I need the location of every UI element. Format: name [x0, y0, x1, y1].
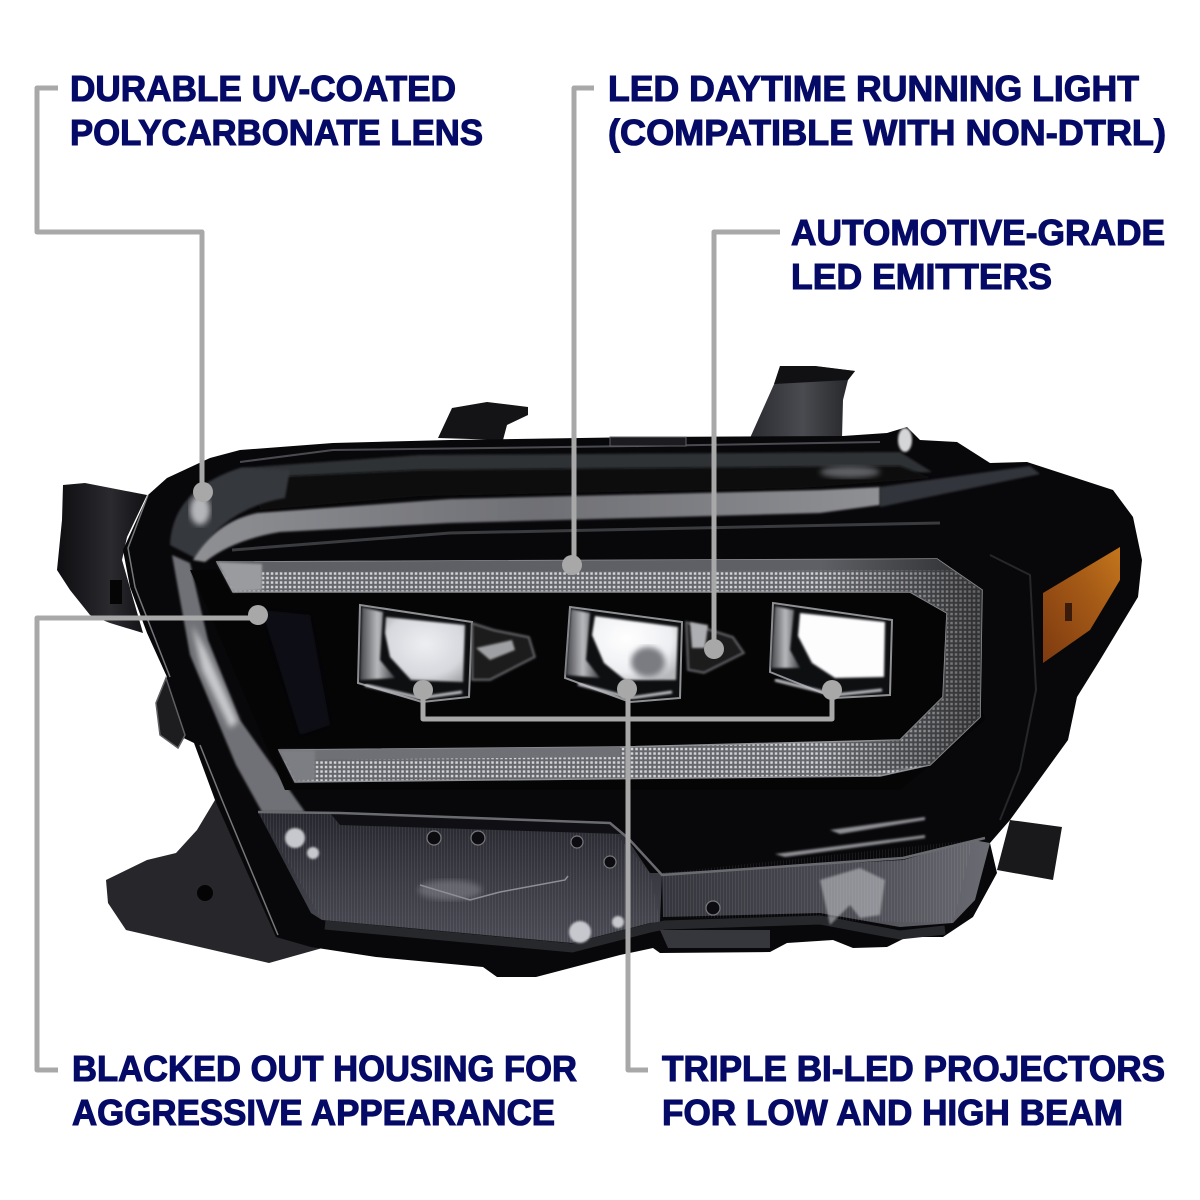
ribbed upper lens band — [240, 452, 932, 490]
corner reflection — [190, 495, 210, 525]
label: triple projectors — [662, 1048, 1165, 1133]
headlight illustration — [57, 366, 1142, 977]
amber side marker — [1043, 547, 1120, 663]
glare at top clip — [898, 428, 912, 452]
lens panel right section — [662, 840, 990, 927]
side emitter — [686, 622, 744, 673]
leader: daytime running light — [574, 88, 594, 565]
right rear bracket — [997, 820, 1062, 880]
right housing gloss edge — [990, 555, 1036, 820]
chrome frame — [770, 603, 892, 698]
lens shadow — [631, 647, 665, 677]
dark band at panel top — [330, 813, 622, 834]
lower chrome trim — [365, 685, 462, 698]
projector 3 — [770, 603, 892, 698]
lens — [592, 616, 678, 680]
left strip reflection — [192, 625, 238, 728]
label: triple projectors: TRIPLE BI-LED PROJECTORS — [662, 1048, 1165, 1089]
ribbed corner of lens — [170, 468, 290, 558]
label: triple projectors: FOR LOW AND HIGH BEAM — [662, 1092, 1123, 1133]
lower chrome trim — [775, 680, 882, 695]
upper right bracket cap — [774, 366, 855, 384]
emitter glare — [476, 640, 515, 660]
side emitter — [472, 623, 535, 680]
top clip — [610, 437, 686, 446]
lens — [798, 613, 885, 678]
strip left corner glare — [217, 562, 262, 592]
black inner bezel — [190, 560, 985, 790]
label: durable lens: DURABLE UV-COATED — [70, 68, 456, 109]
bracket mounting hole — [197, 885, 213, 901]
lower left black bracket — [106, 800, 326, 963]
panel top chrome line — [258, 812, 985, 875]
label: LED emitters — [791, 212, 1165, 297]
label: LED daytime running light: (COMPATIBLE WITH NON-DTRL) — [608, 112, 1166, 153]
leader: LED emitters — [714, 232, 780, 650]
label: LED emitters: LED EMITTERS — [791, 256, 1052, 297]
left mounting tab — [57, 483, 147, 633]
strip smooth upper rim — [217, 559, 952, 572]
leader lines — [37, 88, 832, 1070]
label: blacked out housing: BLACKED OUT HOUSING FOR — [72, 1048, 577, 1089]
chrome left side — [360, 607, 395, 680]
callout dots — [193, 482, 842, 700]
left inner panel shading — [262, 610, 330, 735]
clear outer lens edge — [128, 495, 278, 935]
lens panel ribs — [258, 812, 973, 943]
upper right bracket — [750, 366, 855, 438]
lens — [385, 617, 465, 682]
lens markings — [420, 876, 568, 900]
chrome left side — [771, 606, 800, 668]
label: LED daytime running light — [608, 68, 1166, 153]
label: blacked out housing — [72, 1048, 577, 1133]
top lens rim highlight — [240, 442, 880, 462]
daytime running light strip — [217, 559, 982, 782]
thin inner trim line — [232, 523, 940, 550]
chrome left side — [566, 609, 600, 678]
reflections below projectors — [775, 817, 925, 857]
top glare — [820, 466, 880, 478]
leader: projector bracket — [423, 690, 832, 719]
emitter glare — [690, 622, 708, 648]
lower chrome trim — [578, 684, 672, 698]
strip right dimming — [820, 559, 982, 778]
chrome frame — [565, 607, 682, 702]
upper reflection band — [193, 487, 880, 562]
lens speckle — [418, 880, 482, 900]
chrome frame — [358, 605, 472, 702]
amber marker slot — [1065, 603, 1072, 621]
label: blacked out housing: AGGRESSIVE APPEARANCE — [72, 1092, 555, 1133]
projector 1 — [358, 605, 535, 702]
label: LED emitters: AUTOMOTIVE-GRADE — [791, 212, 1165, 253]
label: durable lens: POLYCARBONATE LENS — [70, 112, 483, 153]
left bright lens strip — [172, 555, 305, 812]
label: LED daytime running light: LED DAYTIME RUNNING LIGHT — [608, 68, 1139, 109]
projector 2 — [565, 607, 744, 702]
upper left bracket — [438, 402, 528, 440]
screw bosses — [285, 828, 885, 943]
dark band under rim — [250, 466, 932, 510]
leader: polycarbonate lens — [37, 88, 202, 492]
lower seal chrome — [325, 920, 945, 948]
lower clear lens panel — [258, 812, 662, 943]
strip lower left glare — [279, 750, 315, 782]
leader: bi-LED projectors — [628, 690, 648, 1070]
strip lower smooth rim — [279, 747, 620, 760]
upper band right taper — [880, 466, 1040, 507]
side rivet — [156, 678, 185, 748]
label: durable lens — [70, 68, 483, 153]
mounting holes — [427, 831, 720, 915]
tab slot — [110, 580, 122, 604]
main housing silhouette — [123, 427, 1142, 977]
lower bumper — [660, 930, 770, 948]
leader: blacked out housing — [37, 618, 258, 1070]
